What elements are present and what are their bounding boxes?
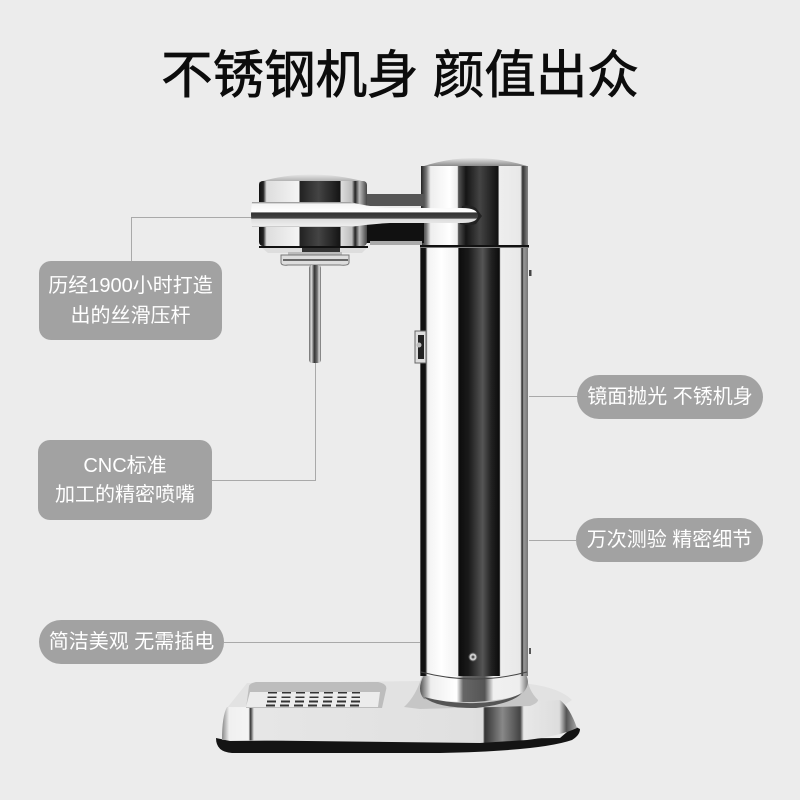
screw xyxy=(469,653,477,661)
callout: precision detail xyxy=(576,518,763,562)
callout: nozzle xyxy=(38,440,212,520)
callout: lever xyxy=(39,261,222,340)
icon: carbonating head xyxy=(259,174,424,265)
icon: lever arm xyxy=(251,202,482,227)
callout: mirror polish xyxy=(577,375,763,419)
callout: precision detail: 万次测验 精密细节 xyxy=(587,529,752,551)
icon: nozzle rod xyxy=(309,265,321,363)
title: 不锈钢机身 颜值出众 xyxy=(161,46,639,104)
icon: stainless steel column xyxy=(415,158,532,679)
bracket xyxy=(415,331,426,363)
callout: mirror polish: 镜面抛光 不锈机身 xyxy=(587,386,753,408)
callout: lever: 出的丝滑压杆 xyxy=(70,305,190,327)
callout: nozzle: CNC标准 xyxy=(83,455,167,477)
callout: nozzle: 加工的精密喷嘴 xyxy=(55,484,195,506)
callout: no power needed xyxy=(39,620,224,664)
callout: no power needed: 简洁美观 无需插电 xyxy=(49,631,214,653)
icon: machine base xyxy=(216,675,580,753)
leader lines xyxy=(132,218,578,642)
callout: lever: 历经1900小时打造 xyxy=(48,275,213,297)
drip tray holes xyxy=(266,692,360,706)
